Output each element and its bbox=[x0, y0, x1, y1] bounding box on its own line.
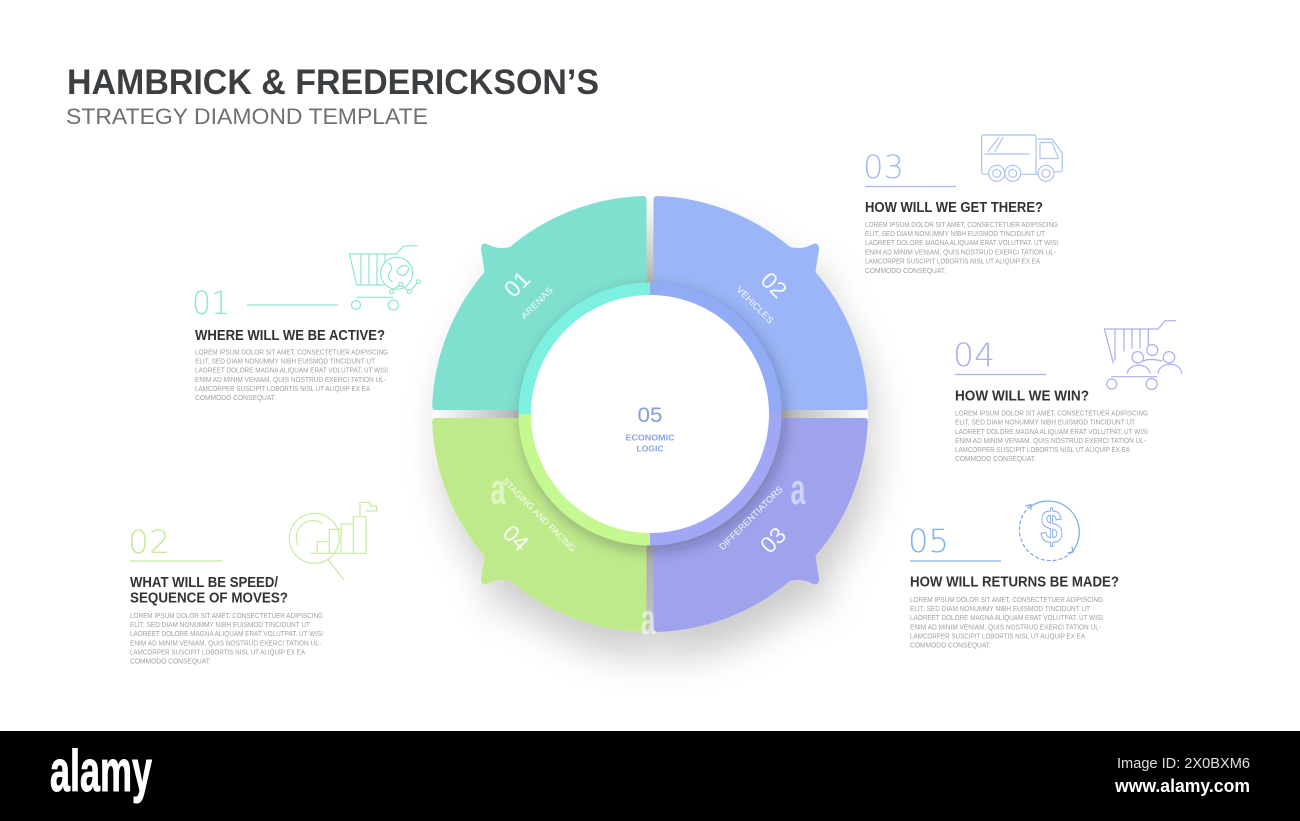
body text: ELIT, SED DIAM NONUMMY NIBH EUISMOD TINCIDUNT UT bbox=[195, 358, 376, 366]
body text: ENIM AD MINIM VENIAM, QUIS NOSTRUD EXERCI TATION UL- bbox=[865, 250, 1057, 256]
body text: LAMCORPER SUSCIPIT LOBORTIS NISL UT ALIQUIP EX EA bbox=[865, 258, 1040, 266]
segment labels: DIFFERENTIATORS bbox=[717, 484, 785, 552]
body text bbox=[955, 410, 1148, 463]
body text: LOREM IPSUM DOLOR SIT AMET, CONSECTETUER ADIPISCING bbox=[130, 613, 323, 620]
segment: vehicles bbox=[654, 196, 868, 410]
body text: LOREM IPSUM DOLOR SIT AMET, CONSECTETUER ADIPISCING bbox=[955, 410, 1148, 418]
segment labels: ARENAS bbox=[519, 285, 555, 321]
body text: ENIM AD MINIM VENIAM, QUIS NOSTRUD EXERCI TATION UL- bbox=[195, 377, 387, 384]
title: HAMBRICK & FREDERICKSON’S bbox=[67, 62, 599, 102]
circular diagram bbox=[432, 196, 868, 644]
body text: LAOREET DOLORE MAGNA ALIQUAM ERAT VOLUTPAT. UT WISI bbox=[865, 240, 1058, 247]
body text: LAOREET DOLORE MAGNA ALIQUAM ERAT VOLUTPAT. UT WISI bbox=[910, 615, 1103, 622]
number 05: 05 bbox=[908, 522, 949, 560]
footer logo: alamy bbox=[50, 739, 152, 804]
center circle bbox=[531, 295, 769, 533]
footer url: www.alamy.com bbox=[1114, 776, 1250, 796]
body text: LAMCORPER SUSCIPIT LOBORTIS NISL UT ALIQUIP EX EA bbox=[955, 447, 1130, 454]
panel: what will be speed bbox=[128, 502, 377, 666]
body text: LAOREET DOLORE MAGNA ALIQUAM ERAT VOLUTPAT. UT WISI bbox=[130, 631, 323, 638]
icon: dollar with cycle arrows bbox=[1019, 500, 1079, 561]
body text: COMMODO CONSEQUAT. bbox=[865, 268, 946, 275]
segment: arenas bbox=[432, 196, 646, 410]
center label: ECONOMIC bbox=[626, 432, 674, 442]
body text bbox=[865, 222, 1058, 275]
body text: ENIM AD MINIM VENIAM, QUIS NOSTRUD EXERCI TATION UL- bbox=[910, 624, 1102, 632]
icon: cart with globe bbox=[350, 246, 420, 310]
inner ring bbox=[518, 282, 782, 546]
heading: WHAT WILL BE SPEED/ bbox=[130, 575, 278, 591]
body text: LOREM IPSUM DOLOR SIT AMET, CONSECTETUER ADIPISCING bbox=[195, 350, 388, 356]
watermark marks: a bbox=[640, 595, 656, 644]
subtitle: STRATEGY DIAMOND TEMPLATE bbox=[66, 104, 428, 129]
panel: how will returns be made bbox=[908, 500, 1119, 650]
heading: HOW WILL WE GET THERE? bbox=[865, 200, 1043, 216]
panel: how will we win bbox=[953, 321, 1182, 463]
body text bbox=[130, 613, 323, 666]
body text: ELIT, SED DIAM NONUMMY NIBH EUISMOD TINCIDUNT UT bbox=[955, 420, 1136, 427]
body text: LOREM IPSUM DOLOR SIT AMET, CONSECTETUER ADIPISCING bbox=[865, 222, 1058, 229]
segment: differentiators bbox=[654, 418, 868, 632]
body text: LAMCORPER SUSCIPIT LOBORTIS NISL UT ALIQUIP EX EA bbox=[910, 634, 1085, 640]
segment labels: 01 bbox=[499, 266, 535, 302]
number 02: 02 bbox=[128, 523, 170, 561]
icon: dollar with cycle arrows: $ bbox=[1040, 500, 1062, 553]
segment labels: 04 bbox=[498, 520, 534, 556]
body text: ELIT, SED DIAM NONUMMY NIBH EUISMOD TINCIDUNT UT bbox=[910, 606, 1091, 613]
segment labels: VEHICLES bbox=[734, 284, 776, 326]
title bbox=[66, 62, 599, 129]
body text bbox=[910, 597, 1103, 650]
watermark marks bbox=[490, 465, 806, 644]
watermark marks: a bbox=[790, 465, 806, 514]
icon: magnifier with bar chart bbox=[289, 502, 377, 579]
body text: COMMODO CONSEQUAT. bbox=[130, 658, 211, 666]
segment labels bbox=[498, 266, 792, 558]
segment labels: 03 bbox=[755, 522, 791, 558]
heading bbox=[130, 575, 288, 607]
panel: how will we get there bbox=[863, 135, 1062, 275]
icon: cart with people bbox=[1104, 321, 1182, 390]
number 04: 04 bbox=[953, 336, 995, 374]
number 01: 01 bbox=[192, 284, 230, 322]
number 03: 03 bbox=[863, 148, 904, 186]
center label: 05 bbox=[638, 404, 662, 427]
footer bar bbox=[0, 731, 1300, 821]
body text: LAOREET DOLORE MAGNA ALIQUAM ERAT VOLUTPAT. UT WISI bbox=[195, 368, 388, 375]
heading: HOW WILL RETURNS BE MADE? bbox=[910, 575, 1119, 591]
segment gaps bbox=[432, 196, 868, 632]
body text: ELIT, SED DIAM NONUMMY NIBH EUISMOD TINCIDUNT UT bbox=[130, 622, 311, 629]
segment labels: 02 bbox=[756, 267, 792, 303]
body text: ELIT, SED DIAM NONUMMY NIBH EUISMOD TINCIDUNT UT bbox=[865, 231, 1046, 238]
body text: COMMODO CONSEQUAT. bbox=[910, 642, 991, 650]
heading: WHERE WILL WE BE ACTIVE? bbox=[195, 328, 385, 344]
segments bbox=[432, 196, 868, 632]
icon: truck bbox=[982, 135, 1062, 181]
body text: LAMCORPER SUSCIPIT LOBORTIS NISL UT ALIQUIP EX EA bbox=[130, 650, 305, 656]
body text: COMMODO CONSEQUAT. bbox=[955, 456, 1036, 463]
body text: ENIM AD MINIM VENIAM, QUIS NOSTRUD EXERCI TATION UL- bbox=[955, 438, 1147, 445]
segment: staging and pacing bbox=[432, 418, 646, 632]
center label: LOGIC bbox=[636, 444, 664, 454]
body text: ENIM AD MINIM VENIAM, QUIS NOSTRUD EXERCI TATION UL- bbox=[130, 640, 322, 647]
body text: LAOREET DOLORE MAGNA ALIQUAM ERAT VOLUTPAT. UT WISI bbox=[955, 429, 1148, 436]
body text: LOREM IPSUM DOLOR SIT AMET, CONSECTETUER ADIPISCING bbox=[910, 597, 1103, 604]
body text: LAMCORPER SUSCIPIT LOBORTIS NISL UT ALIQUIP EX EA bbox=[195, 386, 370, 393]
footer image id: Image ID: 2X0BXM6 bbox=[1117, 755, 1250, 772]
watermark marks: a bbox=[490, 465, 506, 514]
heading: HOW WILL WE WIN? bbox=[955, 389, 1089, 405]
body text bbox=[195, 350, 388, 402]
heading: SEQUENCE OF MOVES? bbox=[130, 591, 288, 607]
panel: where will we be active bbox=[192, 246, 420, 402]
center label bbox=[626, 404, 674, 454]
segment labels: STAGING AND PACING bbox=[500, 476, 578, 554]
body text: COMMODO CONSEQUAT. bbox=[195, 395, 276, 402]
